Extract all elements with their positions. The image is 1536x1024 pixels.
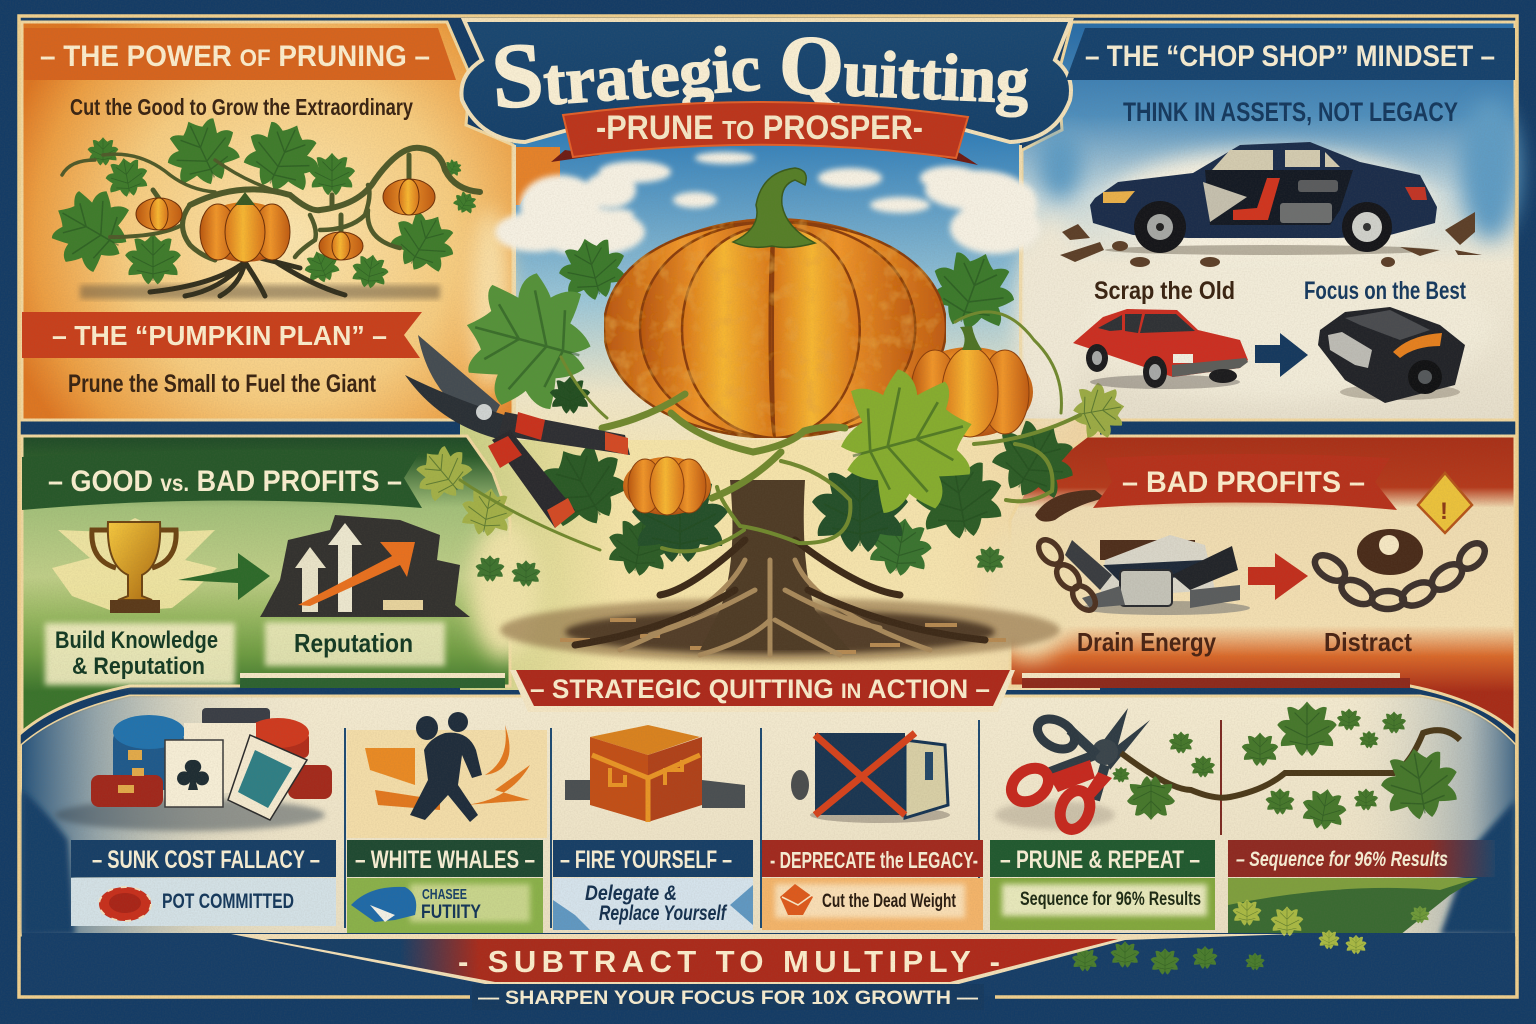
panel: power of pruning background bbox=[22, 22, 513, 420]
text: build knowledge and reputation bbox=[45, 623, 235, 685]
illustration: chain and hole bbox=[1310, 529, 1490, 610]
blue sky edges on right panel bbox=[1038, 100, 1520, 240]
heading: the power of pruning: – THE POWER OF PRUNING – bbox=[40, 40, 430, 73]
sunk cost band bbox=[71, 840, 336, 877]
icon: trophy bbox=[52, 518, 217, 613]
arrow: scrap to focus bbox=[1255, 333, 1308, 377]
text: prune the small: Prune the Small to Fuel the Giant bbox=[68, 370, 377, 398]
icon: walking figure bbox=[347, 712, 547, 838]
branch with leaves bbox=[1112, 701, 1464, 833]
column: fire yourself bbox=[553, 725, 753, 930]
heading: good vs bad profits: – GOOD vs. BAD PROFITS – bbox=[48, 465, 402, 498]
panel: strategic quitting in action background bbox=[22, 696, 1515, 935]
icon: scissors bbox=[995, 708, 1150, 834]
cut the dead weight card bbox=[762, 878, 983, 930]
pumpkin stem bbox=[733, 168, 815, 247]
text: drain energy: Drain Energy bbox=[1077, 627, 1216, 657]
delegate card bbox=[553, 878, 753, 930]
white whales band bbox=[347, 840, 543, 877]
text: scrap the old: Scrap the Old bbox=[1094, 277, 1235, 305]
deprecate band bbox=[762, 840, 983, 877]
chasee futility card: CHASEE bbox=[422, 886, 467, 903]
title word quitting: Quitting bbox=[777, 18, 1031, 122]
cream cloud behind car bbox=[1065, 150, 1495, 400]
white whales band: – WHITE WHALES – bbox=[355, 846, 535, 874]
column: sunk cost fallacy bbox=[55, 708, 336, 926]
panel: centre sky and ground backdrop bbox=[460, 130, 1100, 690]
centre blended washes bbox=[470, 210, 1084, 660]
column dividers bbox=[344, 720, 1222, 930]
title banner bbox=[461, 8, 1071, 142]
fire yourself band: – FIRE YOURSELF – bbox=[560, 846, 732, 874]
text: reputation: Reputation bbox=[294, 628, 413, 658]
text: think in assets: THINK IN ASSETS, NOT LEGACY bbox=[1123, 97, 1458, 127]
sequence card bbox=[990, 878, 1215, 930]
small pumpkins bbox=[623, 326, 1033, 515]
heading: chop shop mindset bbox=[1066, 28, 1515, 80]
text: cut the good: Cut the Good to Grow the Extraordinary bbox=[70, 94, 413, 120]
heading: pumpkin plan bbox=[22, 312, 422, 358]
ground bbox=[500, 598, 1060, 662]
column: white whales bbox=[347, 712, 547, 933]
panel: chop shop background bbox=[1022, 22, 1515, 420]
heading ribbon: strategic quitting in action: – STRATEGIC QUITTING IN ACTION – bbox=[530, 674, 990, 704]
pot committed card bbox=[71, 878, 336, 926]
column: prune and repeat bbox=[990, 708, 1215, 930]
arrow: green bbox=[178, 553, 270, 600]
icon: crossed out server bbox=[791, 733, 950, 823]
pot committed card: POT COMMITTED bbox=[162, 890, 294, 913]
chasee futility card bbox=[347, 878, 543, 933]
heading: pumpkin plan: – THE “PUMPKIN PLAN” – bbox=[52, 320, 387, 351]
prune band bbox=[990, 840, 1215, 877]
bright leaf bbox=[826, 355, 990, 528]
panel: good vs bad profits background bbox=[22, 436, 510, 732]
trunk and roots bbox=[575, 480, 985, 655]
green foliage below panel bbox=[1072, 899, 1430, 975]
heading: bad profits: – BAD PROFITS – bbox=[1122, 466, 1365, 499]
clouds bbox=[495, 152, 1040, 256]
deprecate band: - DEPRECATE the LEGACY- bbox=[770, 847, 978, 873]
subtitle ribbon: -PRUNE TO PROSPER- bbox=[596, 109, 923, 147]
bottom banner: subtract to multiply: - SUBTRACT TO MULTIPLY - bbox=[458, 944, 1000, 979]
illustration: rock with rising arrows bbox=[260, 515, 470, 617]
arrow: red bbox=[1248, 553, 1308, 600]
column: sequence red band bbox=[1228, 840, 1495, 877]
pruning shears bbox=[405, 335, 630, 528]
illustration: chained machine bbox=[1034, 535, 1250, 615]
delegate card: Replace Yourself bbox=[599, 902, 727, 925]
bottom banner: subtract to multiply bbox=[231, 934, 1295, 985]
text: focus on the best: Focus on the Best bbox=[1304, 277, 1467, 305]
icon: warning diamond: ! bbox=[1440, 498, 1448, 525]
centre frame lines bbox=[513, 145, 1022, 420]
vine leaves bbox=[38, 107, 480, 291]
navy strip under columns bbox=[22, 933, 1515, 996]
chasee futility card: FUTIITY bbox=[421, 902, 481, 923]
text: distract: Distract bbox=[1324, 627, 1412, 657]
green grass patch bbox=[1228, 878, 1478, 935]
vine ground bbox=[80, 285, 440, 299]
heading: bad profits bbox=[1093, 454, 1397, 510]
sequence card: Sequence for 96% Results bbox=[1020, 889, 1201, 910]
vine pumpkins bbox=[136, 179, 435, 262]
delegate card: Delegate & bbox=[585, 882, 677, 905]
cream strips along lower panel edges bbox=[240, 673, 1410, 688]
illustration: stripped navy car bbox=[1060, 142, 1482, 267]
big pumpkin bbox=[604, 218, 946, 438]
main pumpkin plant illustration bbox=[405, 168, 1129, 662]
icon: orange box bbox=[565, 725, 745, 822]
vines bbox=[460, 312, 1080, 551]
prune band: – PRUNE & REPEAT – bbox=[1000, 846, 1200, 874]
illustration: pumpkin vine bbox=[38, 107, 480, 299]
vine roots bbox=[150, 258, 345, 296]
brown blotch bbox=[1035, 490, 1105, 522]
heading ribbon: strategic quitting in action bbox=[510, 670, 1015, 712]
text: reputation bbox=[265, 622, 445, 666]
title word strategic: Strategic bbox=[488, 8, 763, 128]
corner washes bbox=[22, 696, 1515, 935]
panel: bad profits background bbox=[1010, 436, 1515, 732]
text: build knowledge and reputation: Build Knowledge bbox=[55, 627, 218, 654]
icon: warning diamond bbox=[1418, 473, 1472, 533]
bottom banner: sharpen your focus: — SHARPEN YOUR FOCUS FOR 10X GROWTH — bbox=[478, 988, 978, 1009]
subtitle ribbon bbox=[551, 102, 978, 165]
sunk cost band: – SUNK COST FALLACY – bbox=[92, 846, 320, 874]
cut the dead weight card: Cut the Dead Weight bbox=[822, 891, 956, 912]
heading: the power of pruning bbox=[24, 28, 456, 80]
top left orange corner bbox=[516, 147, 560, 205]
vine stems bbox=[62, 148, 480, 260]
dark leaves behind pumpkin bbox=[406, 230, 1129, 587]
text: build knowledge and reputation: & Reputation bbox=[72, 653, 205, 680]
heading: good vs bad profits bbox=[22, 449, 422, 510]
column: sequence red band: – Sequence for 96% Results bbox=[1236, 848, 1448, 871]
fire yourself band bbox=[553, 840, 753, 877]
icon: poker chips and cards bbox=[55, 708, 332, 831]
illustration: engine bbox=[1318, 307, 1465, 403]
illustration: red car bbox=[1073, 309, 1248, 389]
column: deprecate the legacy bbox=[762, 733, 983, 930]
